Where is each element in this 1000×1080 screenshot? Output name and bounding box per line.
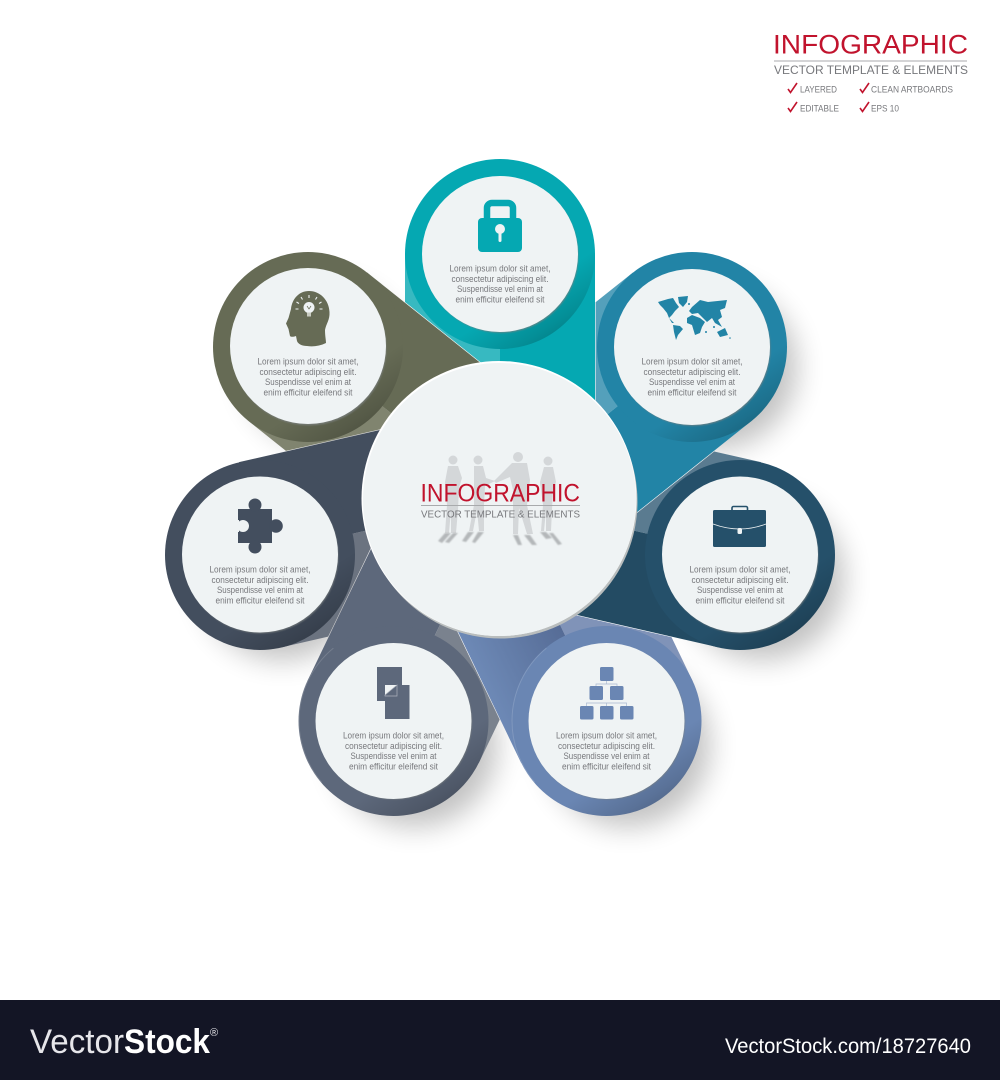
text block: Suspendisse vel enim at [457,284,543,294]
top-right badge [773,30,968,114]
text block [258,356,358,398]
footer bar [0,1000,1000,1080]
footer logo [30,1023,218,1061]
step: slate documents [298,626,488,816]
text block: Suspendisse vel enim at [350,751,437,761]
petal: blue wedge [441,272,752,574]
text block: Suspendisse vel enim at [697,585,783,595]
badge title: INFOGRAPHIC [773,30,968,60]
text block [642,356,742,398]
icon: padlock [478,203,522,252]
text block: consectetur adipiscing elit. [452,274,548,284]
checklist [788,83,953,114]
footer logo: Stock [124,1023,210,1061]
text block: Lorem ipsum dolor sit amet, [556,730,657,740]
text block: enim efficitur eleifend sit [264,388,353,398]
checklist: EPS 10 [871,104,899,114]
checklist: EDITABLE [800,104,839,114]
petal: navy wedge [479,407,761,647]
text block: enim efficitur eleifend sit [562,762,651,772]
text block [556,730,657,772]
text block: Lorem ipsum dolor sit amet, [210,564,310,574]
petal: teal wedge [405,254,595,500]
icon: documents [377,667,410,719]
text block: consectetur adipiscing elit. [345,741,442,751]
petal: olive wedge [248,272,559,574]
text block: Suspendisse vel enim at [265,377,351,387]
step: blue world map [597,252,787,442]
text block: consectetur adipiscing elit. [558,741,655,751]
petal: dark wedge [239,407,521,647]
petal: periwinkle wedge [414,459,692,763]
central hub [362,361,638,638]
text block [343,730,444,772]
text block [210,564,310,606]
text block: consectetur adipiscing elit. [260,367,356,377]
step: periwinkle org chart [512,626,702,816]
hub subtitle: VECTOR TEMPLATE & ELEMENTS [421,510,580,520]
text block: consectetur adipiscing elit. [212,575,308,585]
silhouette floor shadows right [513,532,562,545]
silhouette floor shadows left [438,532,484,543]
text block: Lorem ipsum dolor sit amet, [690,564,790,574]
text block: Lorem ipsum dolor sit amet, [258,356,358,366]
footer reference id: VectorStock.com/18727640 [725,1035,971,1058]
text block: Lorem ipsum dolor sit amet, [450,264,550,274]
step: dark puzzle [165,460,355,650]
text block: Suspendisse vel enim at [649,377,735,387]
text block [690,564,790,606]
footer logo: Vector [30,1023,124,1061]
text block: enim efficitur eleifend sit [349,762,438,772]
icon: world map [658,296,731,340]
text block: enim efficitur eleifend sit [696,596,785,606]
step: navy briefcase [645,460,835,650]
icon: briefcase [713,506,766,547]
icon: puzzle piece [236,498,283,554]
icon: org chart [580,667,634,720]
text block: Lorem ipsum dolor sit amet, [343,730,444,740]
text block [450,264,550,304]
badge subtitle: VECTOR TEMPLATE & ELEMENTS [774,63,968,77]
step: teal lock [405,159,595,349]
text block: consectetur adipiscing elit. [692,575,788,585]
checklist: LAYERED [800,84,837,94]
step: olive head [213,252,403,442]
icon: head with light bulb [286,291,330,346]
petal: slate wedge [308,459,586,763]
text block: enim efficitur eleifend sit [648,388,737,398]
text block: enim efficitur eleifend sit [216,596,305,606]
text block: enim efficitur eleifend sit [456,294,545,304]
text block: Suspendisse vel enim at [217,585,303,595]
text block: Lorem ipsum dolor sit amet, [642,356,742,366]
people silhouettes [445,452,556,534]
footer logo: ® [210,1027,218,1039]
background shadows [200,283,844,827]
checklist: CLEAN ARTBOARDS [871,84,953,94]
text block: Suspendisse vel enim at [564,751,650,761]
hub title: INFOGRAPHIC [420,480,580,508]
text block: consectetur adipiscing elit. [644,367,740,377]
